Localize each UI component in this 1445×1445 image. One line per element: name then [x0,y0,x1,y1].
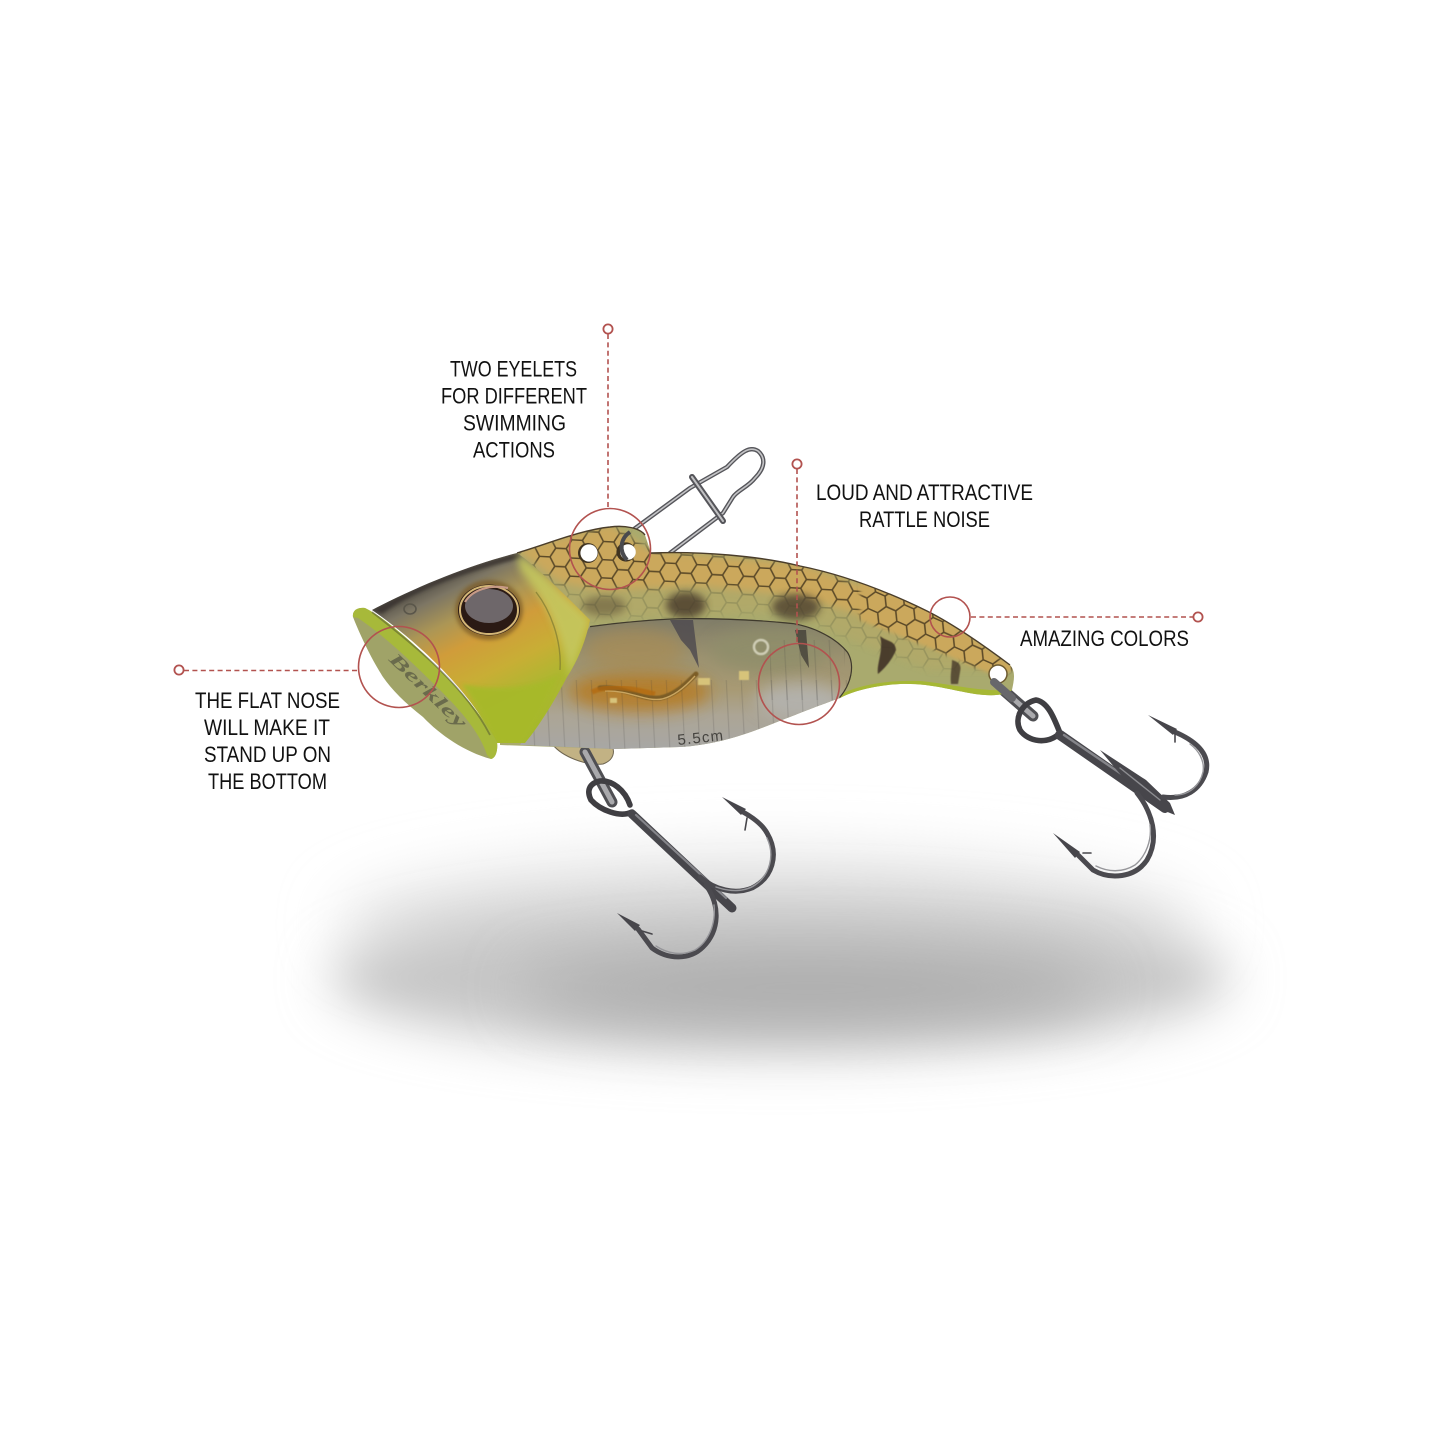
internal fins [670,620,699,668]
tail eyelet [989,665,1012,698]
split ring [994,682,1033,716]
shank [632,814,732,908]
eyelet holes [578,542,636,563]
lure [353,449,1207,957]
text: amazing colors: AMAZING COLORS [1020,626,1189,651]
callout: flat nose [174,626,440,794]
right point [700,812,773,891]
text: rattle noise: RATTLE NOISE [859,507,990,532]
gold rattle bits [610,640,768,703]
size marking: 5.5cm [677,727,725,749]
window top edge [590,618,852,698]
callout: two eyelets [441,324,650,590]
lure body [500,520,1030,749]
shank [1060,735,1165,808]
text: flat nose: STAND UP ON [204,742,331,767]
callout: rattle noise [758,459,1033,724]
snap clip [622,449,763,560]
rear treble hook [994,682,1207,876]
wire through eyelet [622,532,630,560]
text: two eyelets: ACTIONS [473,438,555,462]
left point [638,885,716,957]
left point [1078,793,1154,876]
gold dorsal scales [518,527,862,616]
gill line [536,592,560,670]
ground shadow [330,855,1230,1052]
tail belly stripe [838,685,1012,700]
head [372,553,590,745]
text: two eyelets: SWIMMING [463,410,566,436]
nostril [404,604,416,614]
text: flat nose: WILL MAKE IT [204,715,330,740]
text: flat nose: THE BOTTOM [208,769,327,794]
brand logo: Berkley [384,647,472,734]
text: two eyelets [441,356,587,462]
dorsal edge [517,526,1010,665]
hook eye [1018,700,1060,741]
split ring [585,752,612,802]
text: flat nose: THE FLAT NOSE [195,688,340,713]
callout: amazing colors [930,597,1203,651]
hook eye [589,781,632,814]
text: rattle noise [816,480,1033,532]
middle point [1100,750,1175,815]
amber swoosh [600,674,696,698]
dark blotches [582,592,961,684]
text: rattle noise: LOUD AND ATTRACTIVE [816,480,1033,505]
text: flat nose [195,688,340,794]
flat nose plate [353,608,497,759]
gold rear scales [858,584,1014,676]
text: two eyelets: TWO EYELETS [450,356,577,382]
clear rattle window [515,615,860,750]
body tab [553,745,613,764]
text: two eyelets: FOR DIFFERENT [441,384,587,408]
right point [1163,732,1207,798]
top shade [372,553,522,614]
lower treble hook [553,745,773,957]
faint lower scales [532,564,979,671]
eye [455,580,523,640]
